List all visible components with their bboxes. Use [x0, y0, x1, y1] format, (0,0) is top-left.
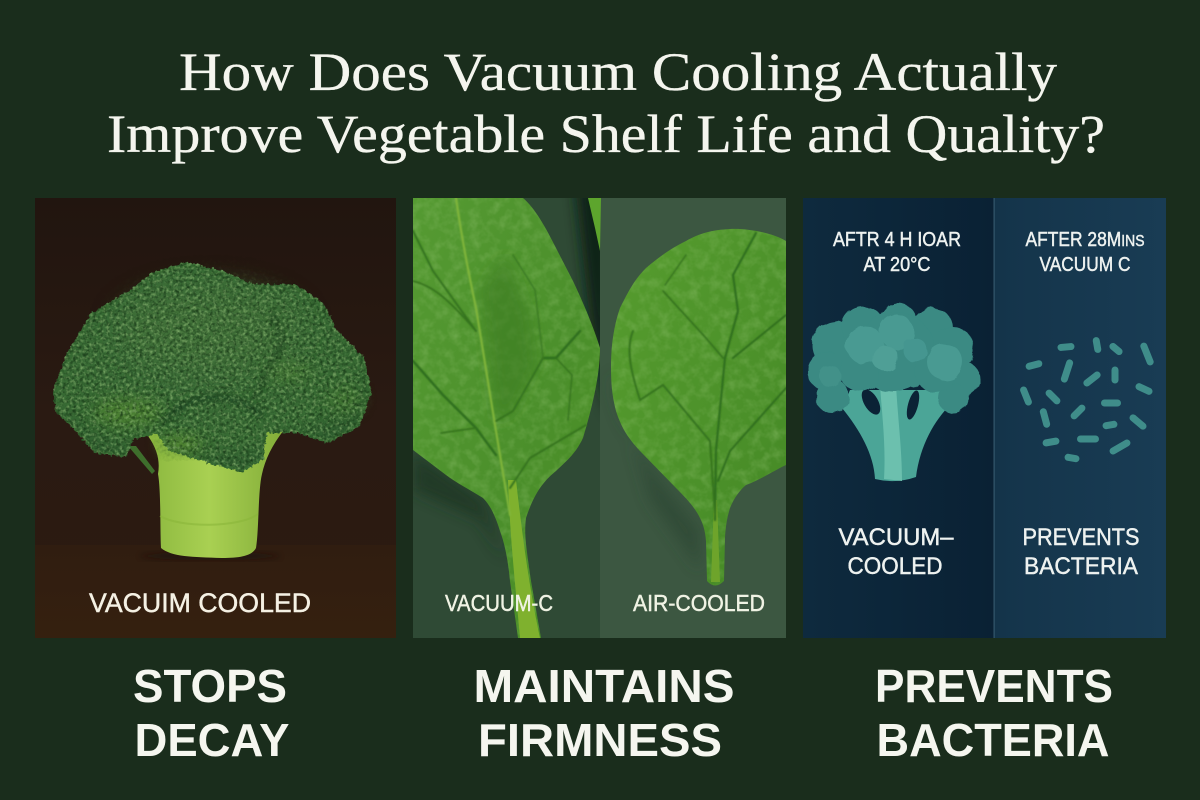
heading: stops decay: STOPS [133, 660, 287, 712]
icon: bacteria [1019, 337, 1155, 463]
heading: prevents bacteria [875, 660, 1113, 766]
heading: prevents bacteria: BACTERIA [876, 714, 1110, 766]
title: How Does Vacuum Cooling Actually [179, 42, 1057, 102]
label: prevents bacteria: BACTERIA [1024, 553, 1138, 580]
icon: left spinach leaf [413, 198, 601, 638]
text: after 28 mins vacuum c: AFTER 28MINS [1026, 229, 1144, 251]
label: prevents bacteria [1022, 524, 1140, 580]
label: vacuum-c: VACUUM-C [445, 590, 553, 616]
text: after 28 mins vacuum c: VACUUM C [1040, 254, 1130, 276]
icon: broccoli stem [130, 432, 282, 558]
label: vacuum-cooled: VACUUM– [838, 524, 954, 551]
heading: stops decay [133, 660, 290, 766]
label: air-cooled: AIR-COOLED [633, 590, 765, 616]
heading: maintains firmness: FIRMNESS [478, 714, 722, 766]
title [107, 42, 1105, 164]
icon: teal broccoli [807, 303, 979, 481]
text: after 4 hour at 20C [833, 229, 961, 276]
icon: right spinach leaf [611, 229, 786, 586]
heading: maintains firmness [474, 660, 734, 766]
text: after 28 mins vacuum c [1026, 229, 1144, 276]
label: vacuum-cooled: COOLED [848, 553, 942, 580]
panel: stops decay broccoli photo [35, 198, 396, 638]
heading: maintains firmness: MAINTAINS [474, 660, 734, 712]
heading: prevents bacteria: PREVENTS [875, 660, 1113, 712]
heading: stops decay: DECAY [134, 714, 290, 766]
panel: prevents bacteria illustration [803, 198, 1166, 638]
text: after 4 hour at 20C: AT 20°C [864, 254, 930, 276]
label: prevents bacteria: PREVENTS [1022, 524, 1140, 551]
panel: maintains firmness spinach photo [413, 185, 786, 638]
text: after 4 hour at 20C: AFTR 4 H IOAR [833, 229, 961, 251]
icon: broccoli crown [55, 264, 370, 470]
title: Improve Vegetable Shelf Life and Quality? [107, 104, 1105, 164]
label: vacuum-cooled [838, 524, 954, 580]
label: vacuum cooled: VACUIM COOLED [89, 588, 311, 618]
